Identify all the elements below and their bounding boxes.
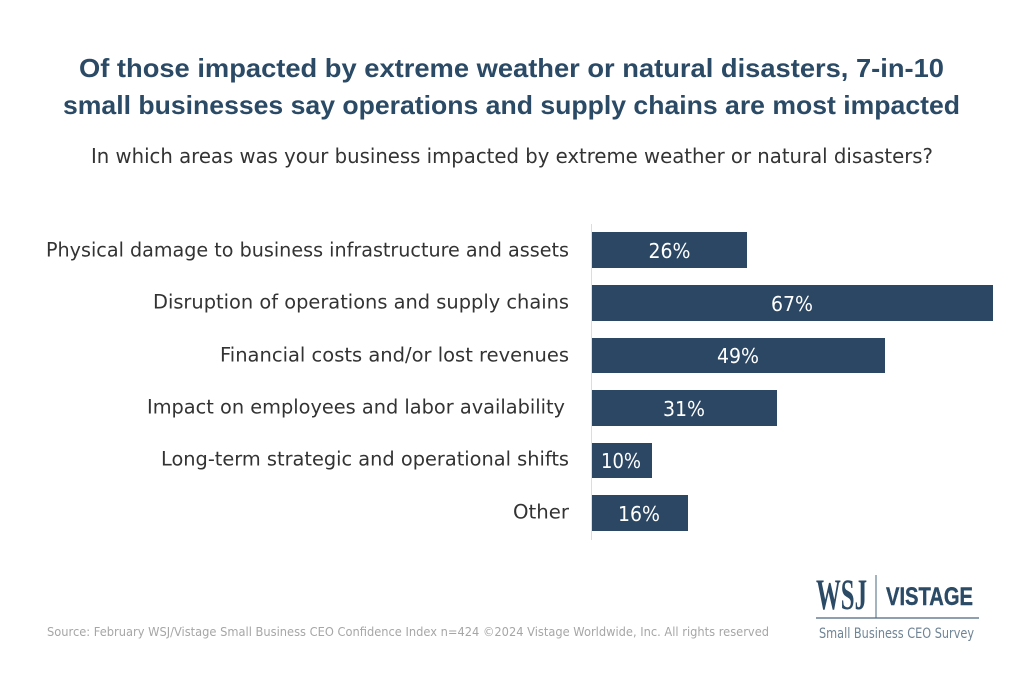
bar values: 10% — [601, 449, 641, 473]
category labels: Impact on employees and labor availability — [147, 396, 565, 418]
source footnote: Source: February WSJ/Vistage Small Business CEO Confidence Index n=424 ©2024 Vistage Worldwide, Inc. All rights reserved — [47, 625, 769, 639]
category labels: Disruption of operations and supply chains — [153, 290, 569, 314]
subtitle question: In which areas was your business impacted by extreme weather or natural disasters? — [91, 144, 933, 168]
bar values: 26% — [648, 239, 690, 263]
category labels — [46, 238, 570, 524]
bars — [592, 232, 993, 531]
category labels: Physical damage to business infrastructure and assets — [46, 238, 569, 262]
title — [63, 53, 960, 120]
logo: WSJ Vistage Small Business CEO Survey — [816, 572, 979, 642]
bar values: 67% — [771, 292, 813, 316]
logo: WSJ Vistage Small Business CEO Survey: WSJ — [816, 572, 867, 619]
logo: WSJ Vistage Small Business CEO Survey: Small Business CEO Survey — [819, 626, 974, 642]
title: small businesses say operations and supply chains are most impacted — [63, 90, 960, 120]
bar values: 49% — [717, 344, 759, 368]
bar values: 16% — [618, 502, 660, 526]
category labels: Long-term strategic and operational shifts — [161, 448, 569, 470]
logo: WSJ Vistage Small Business CEO Survey: VISTAGE — [886, 583, 973, 611]
category labels: Financial costs and/or lost revenues — [220, 344, 569, 366]
category labels: Other — [513, 500, 570, 524]
bar chart — [46, 224, 993, 540]
title: Of those impacted by extreme weather or natural disasters, 7-in-10 — [79, 53, 944, 83]
bar values — [601, 239, 813, 526]
bar values: 31% — [663, 397, 705, 421]
